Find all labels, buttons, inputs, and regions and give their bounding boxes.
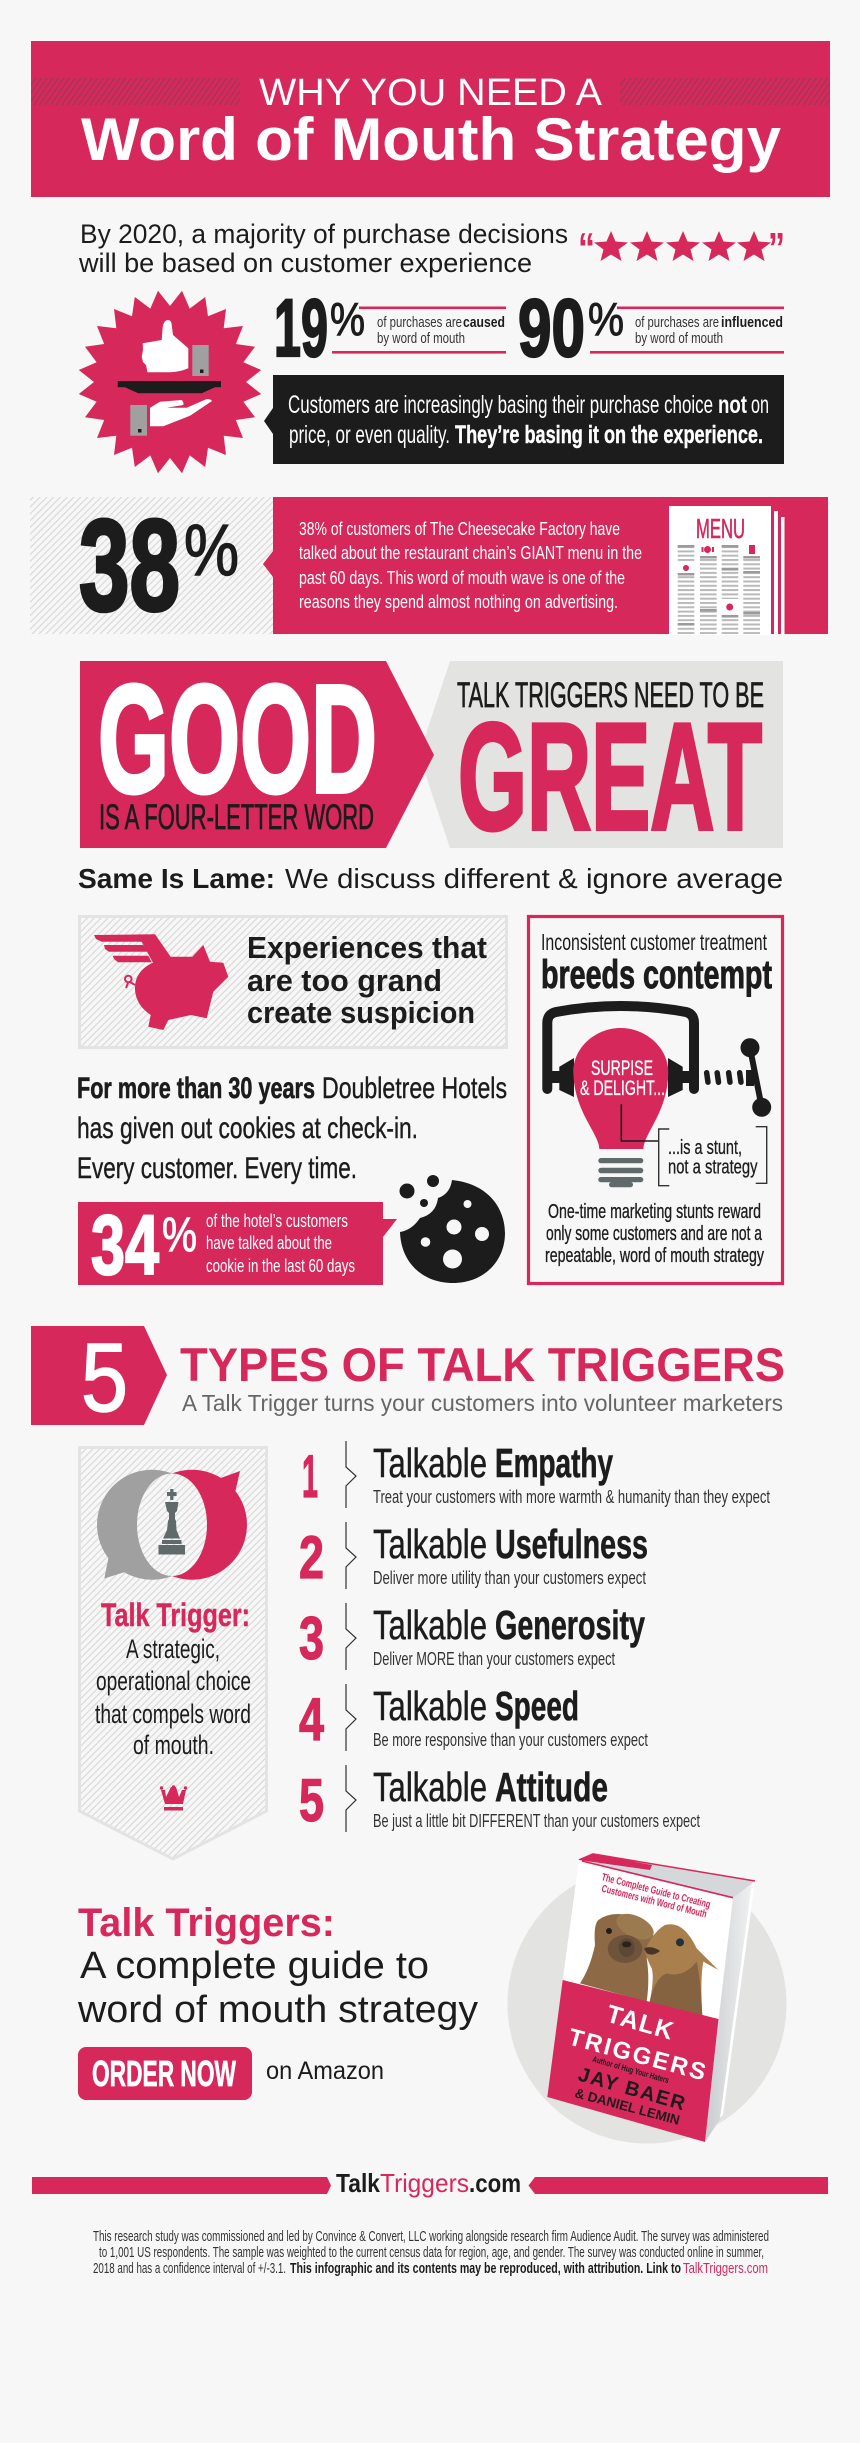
- button: order now: ORDER NOW: [92, 2053, 236, 2094]
- panel: Cheesecake Factory stat: [30, 492, 828, 638]
- list item 4: speed: Speed: [495, 1683, 579, 1729]
- list item 1: empathy: [302, 1440, 770, 1510]
- stat: 19 percent caused: %: [330, 293, 365, 345]
- callout: 34 percent: cookie in the last 60 days: [206, 1256, 355, 1276]
- icon: crown: [160, 1785, 187, 1810]
- panel heading: [541, 929, 772, 997]
- heading: five types of talk triggers: A Talk Trigger turns your customers into volunteer marketers: [182, 1390, 783, 1416]
- grey circle behind book: [508, 1864, 786, 2144]
- title line two: Word of Mouth Strategy: [81, 106, 782, 173]
- stat: 19 percent caused: 19: [274, 283, 328, 374]
- list item 3: generosity: Talkable: [373, 1602, 487, 1648]
- list item 2: usefulness: Usefulness: [495, 1521, 648, 1567]
- stat: 90 percent influenced: [518, 283, 784, 374]
- icon: headphones on lightbulb: [547, 1006, 694, 1187]
- suspicion text: Experiences that: [247, 930, 487, 965]
- panel heading: Inconsistent customer treatment: [541, 929, 767, 955]
- stat: 90 percent influenced: of purchases are: [635, 314, 719, 331]
- surprise and delight label: SURPISE: [591, 1057, 653, 1080]
- stunts body text: only some customers and are not a: [546, 1222, 762, 1245]
- definition text: Talk Trigger:: [101, 1597, 250, 1633]
- black callout: on: [751, 391, 769, 419]
- list item 5: attitude: Attitude: [495, 1764, 608, 1810]
- callout: is a stunt: [621, 1104, 767, 1186]
- black callout: price, or even quality.: [289, 421, 450, 449]
- Cheesecake Factory text: 38% of customers of The Cheesecake Factory have: [299, 519, 620, 539]
- Cheesecake Factory text: [299, 519, 642, 612]
- Doubletree text: For more than 30 years: [77, 1072, 315, 1105]
- button: order now: [78, 2047, 252, 2100]
- list item 2: usefulness: 2: [299, 1524, 324, 1591]
- panel: GREAT on grey arrow: [419, 661, 783, 862]
- panel: talk trigger definition ribbon: [80, 1448, 266, 1859]
- icon: wind-up key: [704, 1038, 771, 1117]
- Doubletree text: Every customer. Every time.: [77, 1152, 357, 1185]
- five star rating: [578, 224, 785, 273]
- stat: 90 percent influenced: 90: [518, 283, 585, 374]
- fine print: This infographic and its contents may be reproduced, with attribution. Link to: [290, 2260, 681, 2277]
- title banner: [31, 41, 830, 197]
- definition text: of mouth.: [133, 1730, 214, 1760]
- list item 3: generosity: Deliver MORE than your customers expect: [373, 1649, 615, 1669]
- callout: is a stunt: ...is a stunt,: [668, 1137, 742, 1159]
- GOOD: GOOD: [98, 653, 377, 825]
- footer banner with website: Talk: [336, 2168, 380, 2198]
- list item 5: attitude: Talkable: [373, 1764, 487, 1810]
- list item 5: attitude: [299, 1764, 700, 1834]
- list item 4: speed: Be more responsive than your customers expect: [373, 1730, 648, 1750]
- heading: five types of talk triggers: [180, 1338, 785, 1416]
- five star rating: ”: [768, 224, 785, 273]
- footer banner with website: [32, 2168, 828, 2198]
- icon: menu: [669, 506, 784, 635]
- footer banner with website: Triggers: [380, 2168, 469, 2198]
- callout: 34 percent: [78, 1198, 397, 1292]
- section banner: number 5: 5: [81, 1323, 128, 1432]
- stunts body text: repeatable, word of mouth strategy: [545, 1244, 765, 1267]
- is a four letter word: IS A FOUR-LETTER WORD: [99, 798, 374, 837]
- stat: 19 percent caused: caused: [463, 314, 505, 331]
- title line one: WHY YOU NEED A: [259, 72, 603, 114]
- definition text: A strategic,: [126, 1634, 220, 1664]
- icon: speech bubbles with chess king: [97, 1470, 247, 1580]
- heading: same is lame: [78, 863, 783, 894]
- Doubletree text: has given out cookies at check-in.: [77, 1112, 418, 1145]
- list item 1: empathy: Talkable: [373, 1440, 487, 1486]
- list item 5: attitude: Be just a little bit DIFFERENT than your customers expect: [373, 1811, 700, 1831]
- suspicion text: [247, 930, 487, 1030]
- book subtitle: Customers with Word of Mouth: [600, 1883, 708, 1921]
- stat: 90 percent influenced: influenced: [721, 314, 783, 331]
- intro text: By 2020, a majority of purchase decisions: [80, 219, 568, 249]
- list item 3: generosity: Generosity: [495, 1602, 645, 1648]
- book: Talk Triggers: [547, 1854, 755, 2142]
- fine print: TalkTriggers.com: [683, 2260, 768, 2277]
- list item 4: speed: [299, 1683, 648, 1753]
- list item 2: usefulness: [299, 1521, 648, 1591]
- call to action heading: A complete guide to: [80, 1945, 429, 1987]
- on amazon text: on Amazon: [266, 2057, 384, 2085]
- panel: flying pig: [80, 916, 506, 1048]
- alpaca photo: [580, 1909, 718, 2017]
- stat: 19 percent caused: of purchases are: [377, 314, 462, 331]
- section banner: number 5: [31, 1323, 167, 1432]
- callout: is a stunt: not a strategy: [668, 1156, 758, 1178]
- book title: TRIGGERS: [565, 2024, 709, 2086]
- book authors: & DANIEL LEMIN: [573, 2085, 681, 2128]
- Doubletree text: [77, 1072, 507, 1185]
- list item 1: empathy: Empathy: [495, 1440, 613, 1486]
- call to action heading: word of mouth strategy: [77, 1989, 478, 2031]
- panel: breeds contempt: [528, 916, 782, 1284]
- surprise and delight label: [580, 1057, 665, 1100]
- stat: 19 percent caused: by word of mouth: [377, 330, 465, 347]
- footer banner with website: .com: [469, 2168, 521, 2198]
- stunts body text: One-time marketing stunts reward: [548, 1200, 761, 1223]
- black callout: [264, 375, 784, 464]
- icon: menu: MENU: [696, 513, 745, 544]
- book authors: Author of Hug Your Haters: [591, 2054, 670, 2085]
- definition text: operational choice: [96, 1666, 251, 1696]
- surprise and delight label: & DELIGHT...: [580, 1077, 665, 1100]
- suspicion text: create suspicion: [247, 995, 475, 1030]
- heading: same is lame: Same Is Lame:: [78, 863, 275, 894]
- list item 5: attitude: 5: [299, 1767, 324, 1834]
- Doubletree text: Doubletree Hotels: [322, 1072, 507, 1105]
- stat: 19 percent caused: [274, 283, 506, 374]
- definition text: that compels word: [95, 1699, 251, 1729]
- icon: flying pig: [94, 934, 228, 1030]
- icon: cookie: [400, 1175, 505, 1283]
- intro text: [78, 219, 568, 278]
- panel: GOOD pink arrow: [80, 653, 434, 848]
- heading: same is lame: We discuss different & ignore average: [285, 863, 783, 894]
- stunts body text: [545, 1200, 765, 1267]
- list item 3: generosity: 3: [299, 1605, 324, 1672]
- callout: 34 percent: have talked about the: [206, 1233, 332, 1253]
- heading: five types of talk triggers: TYPES OF TALK TRIGGERS: [180, 1338, 785, 1391]
- book subtitle: [600, 1871, 712, 1921]
- Cheesecake Factory text: talked about the restaurant chain’s GIANT menu in the: [299, 543, 642, 563]
- book authors: JAY BAER: [576, 2064, 688, 2115]
- Cheesecake Factory text: past 60 days. This word of mouth wave is one of the: [299, 568, 625, 588]
- fine print: [93, 2228, 769, 2277]
- panel heading: breeds contempt: [541, 953, 772, 997]
- stat: 90 percent influenced: %: [588, 293, 624, 345]
- suspicion text: are too grand: [247, 963, 442, 998]
- icon: starburst with thumbs up on a tray: [79, 291, 261, 473]
- fine print: 2018 and has a confidence interval of +/-3.1.: [93, 2260, 286, 2277]
- call to action heading: Talk Triggers:: [78, 1901, 335, 1945]
- list item 2: usefulness: Talkable: [373, 1521, 487, 1567]
- book authors: [573, 2054, 688, 2128]
- callout: 34 percent: %: [162, 1209, 197, 1262]
- list item 4: speed: 4: [299, 1686, 324, 1753]
- callout: 34 percent: of the hotel’s customers: [206, 1211, 348, 1231]
- list item 2: usefulness: Deliver more utility than your customers expect: [373, 1568, 646, 1588]
- 38 percent figure: 38: [79, 492, 180, 638]
- book subtitle: The Complete Guide to Creating: [600, 1871, 712, 1911]
- intro text: will be based on customer experience: [78, 248, 532, 278]
- black callout: not: [718, 391, 747, 419]
- list item 4: speed: Talkable: [373, 1683, 487, 1729]
- list item 1: empathy: 1: [302, 1443, 318, 1510]
- 38 percent figure: %: [184, 511, 239, 591]
- five star rating: “: [578, 224, 595, 273]
- stat: 90 percent influenced: by word of mouth: [635, 330, 723, 347]
- book title: TALK: [603, 2000, 676, 2046]
- list item 3: generosity: [299, 1602, 645, 1672]
- callout: 34 percent: 34: [91, 1198, 159, 1292]
- Cheesecake Factory text: reasons they spend almost nothing on advertising.: [299, 592, 618, 612]
- definition text: [95, 1597, 251, 1760]
- call to action heading: [77, 1901, 478, 2031]
